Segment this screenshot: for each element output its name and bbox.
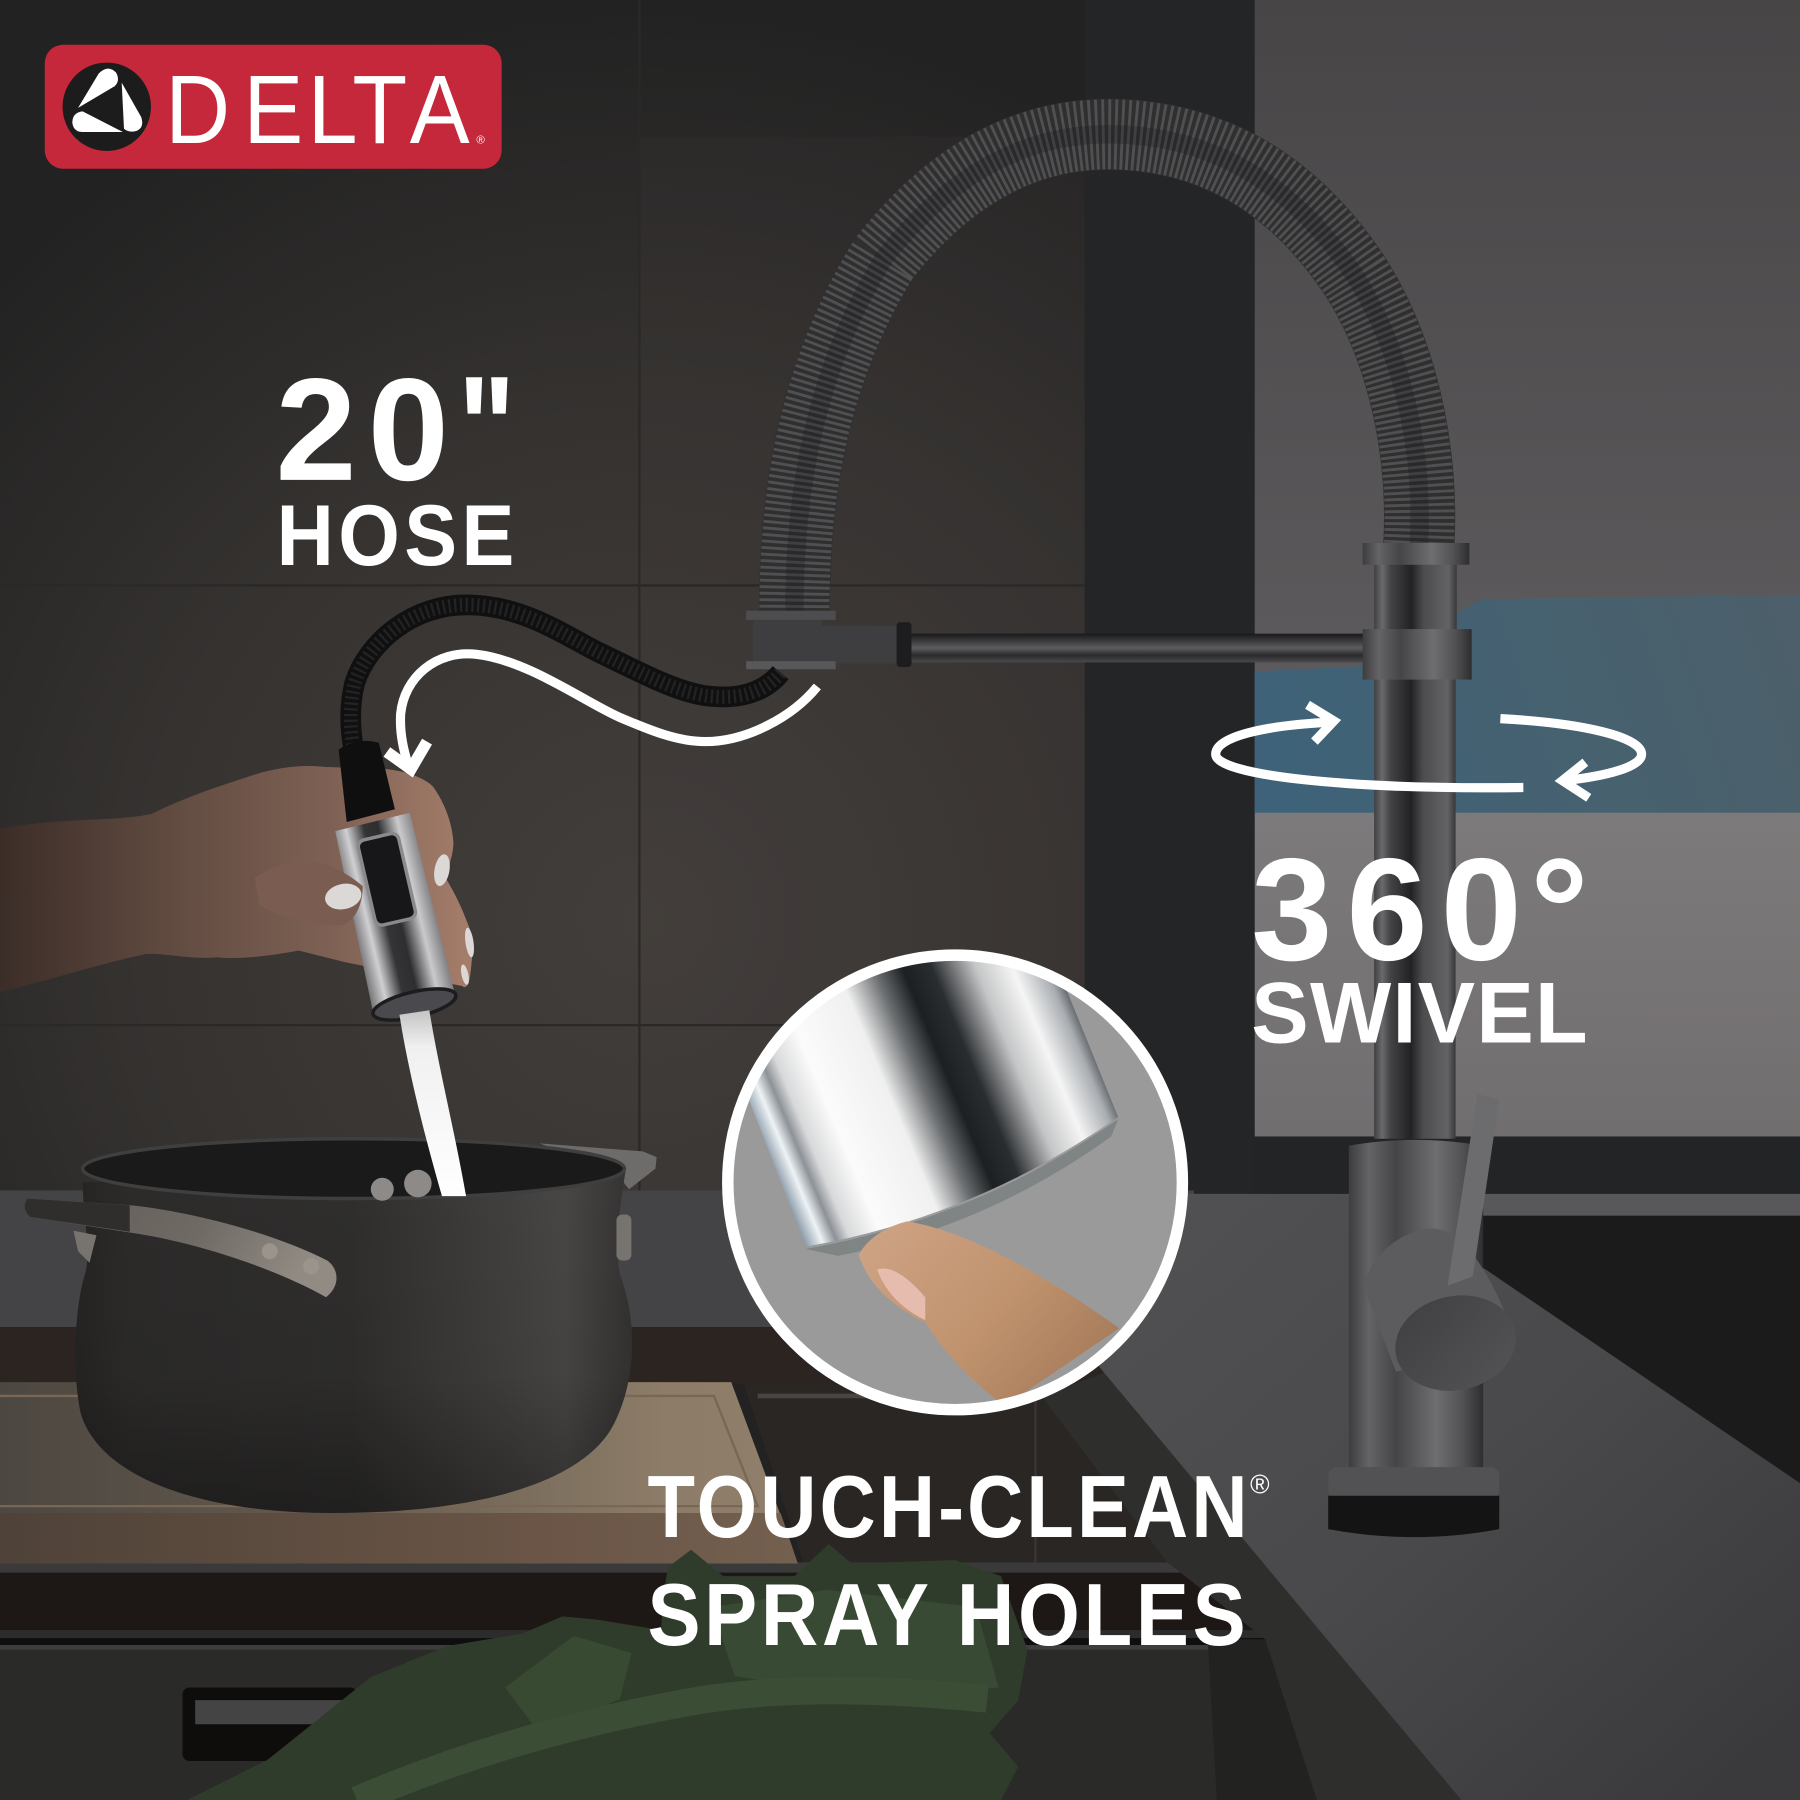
panel: right dark background behind counter	[1251, 1194, 1800, 1492]
pot: rim	[83, 1139, 624, 1198]
logo: wordmark: DELTA	[165, 54, 470, 164]
faucet: handle lever	[1448, 1094, 1499, 1286]
close-up: chrome spray head	[749, 961, 1118, 1246]
callout: touch-clean spray holes	[647, 1457, 1270, 1664]
hand: arm and palm	[0, 766, 473, 992]
close-up: fingernail	[877, 1268, 925, 1320]
faucet: base body	[1349, 1140, 1483, 1474]
panel: drawer handle recess	[183, 1688, 357, 1761]
panel: touch-clean close-up circle	[677, 941, 1182, 1410]
callout: 360 swivel	[1251, 828, 1589, 1061]
sprayer: button	[357, 832, 417, 926]
close-up: grey background	[728, 955, 1182, 1410]
close-up: rubber spray holes	[806, 1119, 1118, 1256]
faucet: coiled spring spout	[794, 134, 1420, 614]
panel: dark window column	[1085, 0, 1255, 1194]
pot: right bracket	[616, 1215, 631, 1260]
text: hose: HOSE	[277, 487, 514, 584]
pot: body	[75, 1171, 632, 1513]
illustration: flexible black hose	[351, 605, 781, 748]
arrow: hose pull-down	[387, 654, 817, 769]
hand: white fingernails	[323, 853, 476, 985]
panel: sink edge	[1041, 1373, 1461, 1800]
faucet: horizontal arm	[822, 622, 1371, 667]
pot: steel balls	[371, 1170, 432, 1201]
pot: left bracket	[73, 1231, 96, 1263]
faucet: mounting ring	[1328, 1467, 1499, 1537]
heading: touch-clean: ®	[1250, 1469, 1270, 1499]
illustration: lettuce leaves	[187, 1544, 1027, 1800]
sprayer: black collar	[339, 741, 395, 822]
logo: red badge	[45, 45, 502, 169]
arrow: 360 degree swivel	[1216, 705, 1642, 798]
panel: window with lake view	[1255, 0, 1800, 1136]
faucet: handle cap	[1386, 1284, 1525, 1402]
heading: spray holes: SPRAY HOLES	[647, 1565, 1246, 1664]
logo: Delta	[45, 45, 502, 169]
close-up: white ring	[728, 955, 1182, 1410]
pot: back handle	[540, 1143, 657, 1189]
heading: 20 inch: 20	[276, 348, 449, 511]
text: swivel: SWIVEL	[1251, 965, 1588, 1061]
logo: wordmark: ®	[476, 134, 485, 146]
sprayer: metal body	[335, 813, 455, 1012]
logo: triangle emblem	[63, 63, 151, 151]
panel: sink basin	[744, 1384, 1167, 1562]
illustration: cooking pot	[25, 1139, 657, 1513]
pot: front handle	[25, 1198, 337, 1297]
callout: 20 inch hose	[276, 346, 515, 584]
panel: window frame base	[1255, 1136, 1800, 1194]
hand: thumb	[255, 862, 363, 925]
faucet: handle hub	[1364, 1228, 1515, 1372]
sprayer: nozzle	[370, 983, 459, 1026]
panel: cutting board	[0, 1382, 798, 1564]
illustration: water stream	[399, 1010, 466, 1196]
panel: countertop	[1068, 1194, 1800, 1800]
close-up: finger	[859, 1221, 1119, 1406]
heading: 20 inch: "	[458, 346, 515, 509]
illustration: kitchen faucet	[746, 134, 1525, 1537]
panel: lower cabinet	[0, 1562, 1297, 1800]
heading: touch-clean: TOUCH-CLEAN	[647, 1457, 1248, 1556]
faucet: upper collars	[1363, 543, 1472, 680]
faucet: vertical column	[1374, 680, 1456, 1139]
heading: 360 degrees: 360°	[1251, 828, 1589, 991]
illustration: hand holding sprayer	[0, 741, 476, 1026]
panel: backsplash band	[0, 1190, 1194, 1384]
faucet: spout junction	[746, 611, 836, 669]
panel: kitchen wall background	[0, 0, 1085, 1194]
